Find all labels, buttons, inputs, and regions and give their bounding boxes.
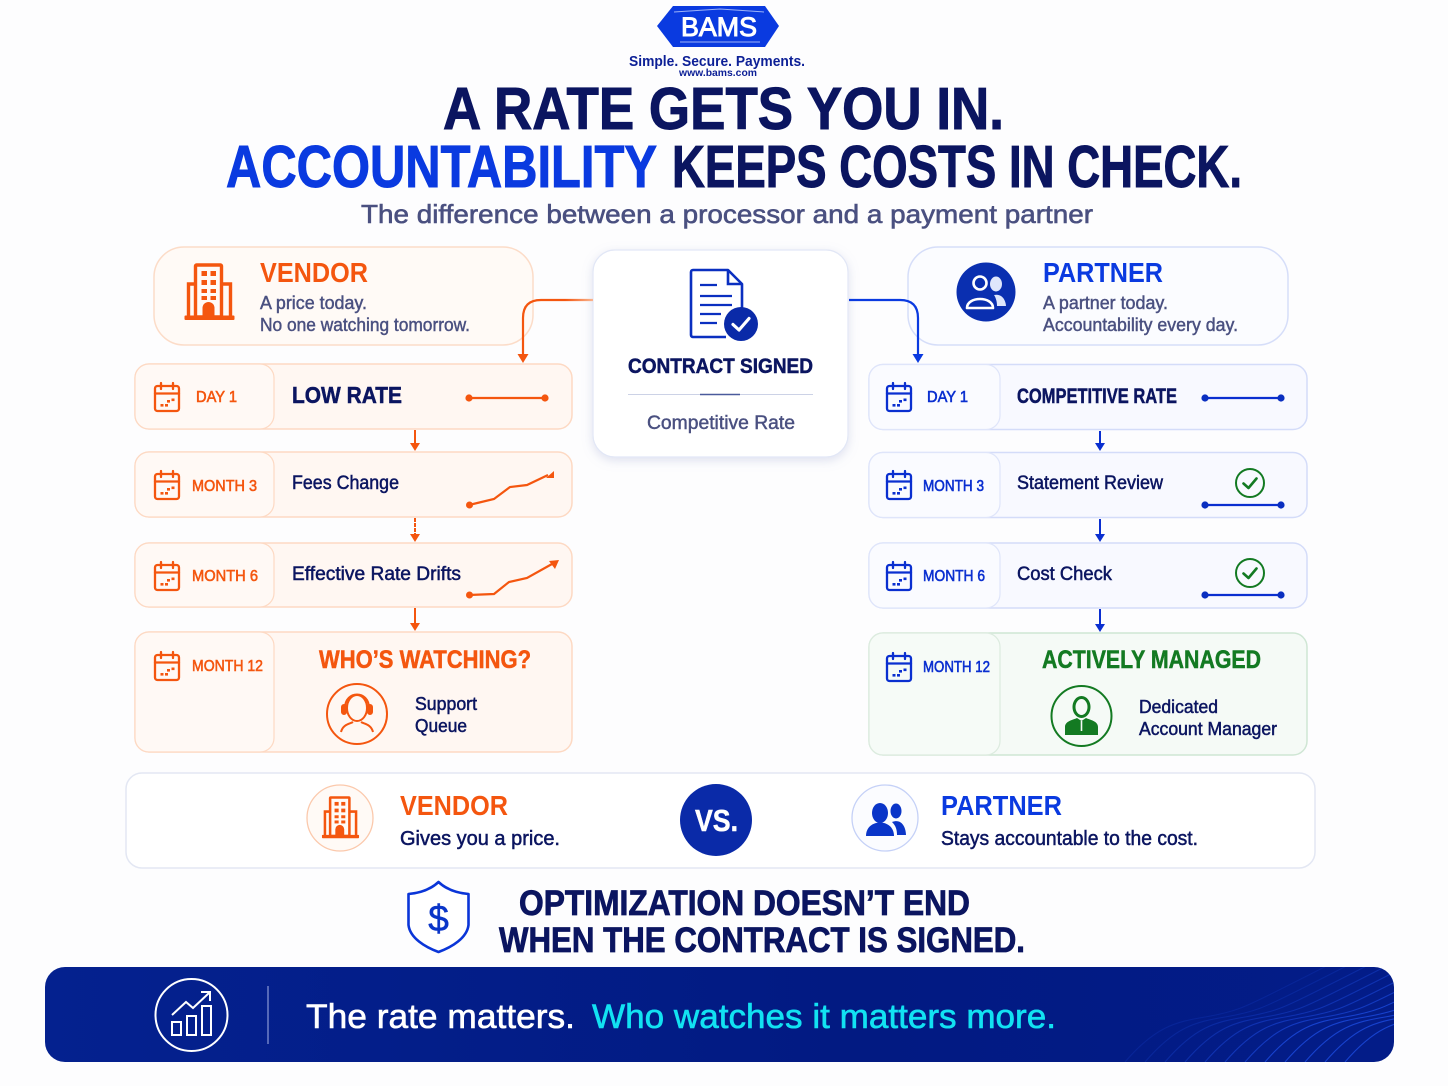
- title: [226, 76, 1242, 200]
- vendor row: month 6: [135, 543, 572, 607]
- subtitle: The difference between a processor and a payment partner: [361, 199, 1093, 229]
- panel: contract signed: [593, 250, 848, 457]
- arrow: [410, 518, 420, 542]
- partner row: month 12: Dedicated: [1139, 697, 1218, 717]
- arrow: [410, 608, 420, 631]
- partner row: month 12: Account Manager: [1139, 719, 1277, 739]
- vendor row: day 1: DAY 1: [196, 389, 237, 406]
- vendor row: month 3: Fees Change: [292, 473, 399, 494]
- vendor row: month 3: MONTH 3: [192, 478, 257, 495]
- vendor header: A price today.: [260, 293, 367, 313]
- partner row: month 3: [869, 452, 1307, 518]
- panel: vendor vs partner: VENDOR: [400, 790, 508, 821]
- icon: shield with dollar: [408, 882, 468, 952]
- vendor row: month 12: Support: [415, 694, 477, 714]
- partner row: day 1: [869, 364, 1307, 430]
- panel: vendor column: [135, 247, 572, 752]
- partner row: month 12: [869, 633, 1307, 755]
- arrow: [1095, 519, 1105, 542]
- partner row: month 12: MONTH 12: [923, 659, 990, 676]
- icon: vendor building: [307, 785, 373, 851]
- icon: account manager: [1052, 686, 1112, 746]
- partner header: A partner today.: [1043, 293, 1168, 313]
- vendor row: month 6: Effective Rate Drifts: [292, 564, 461, 585]
- logo: BAMS: www.bams.com: [678, 67, 757, 79]
- vendor row: month 12: WHO’S WATCHING?: [319, 646, 531, 674]
- partner row: day 1: COMPETITIVE RATE: [1017, 385, 1177, 408]
- banner: [45, 967, 1394, 1062]
- logo: BAMS: [629, 6, 805, 79]
- panel: vendor vs partner: [126, 773, 1315, 868]
- vendor row: day 1: [135, 364, 572, 429]
- banner: Who watches it matters more.: [592, 998, 1056, 1036]
- panel: vendor vs partner: Gives you a price.: [400, 828, 560, 850]
- icon: partner people: [956, 262, 1016, 322]
- vendor row: month 12: Queue: [415, 716, 467, 736]
- title: A RATE GETS YOU IN.: [443, 76, 1004, 142]
- closing statement: OPTIMIZATION DOESN’T END: [519, 884, 970, 923]
- logo: BAMS: Simple. Secure. Payments.: [629, 54, 805, 70]
- vendor row: month 12: [135, 632, 572, 752]
- vendor row: month 12: MONTH 12: [192, 658, 263, 675]
- logo: BAMS: BAMS: [681, 12, 757, 42]
- partner header: PARTNER: [1043, 257, 1163, 288]
- banner: The rate matters.: [306, 998, 575, 1036]
- arrow: contract to partner: [849, 300, 924, 363]
- panel: partner column: [869, 247, 1307, 755]
- vendor row: month 6: MONTH 6: [192, 568, 258, 585]
- badge: VS: VS.: [695, 803, 738, 838]
- panel: contract signed: CONTRACT SIGNED: [628, 355, 813, 378]
- partner row: month 6: MONTH 6: [923, 568, 985, 585]
- partner row: month 6: [869, 543, 1307, 608]
- partner row: month 6: Cost Check: [1017, 564, 1112, 585]
- icon: support agent: [327, 684, 387, 744]
- closing statement: WHEN THE CONTRACT IS SIGNED.: [499, 921, 1025, 960]
- vendor row: month 3: [135, 452, 572, 517]
- vendor header: [154, 247, 533, 345]
- icon: shield with dollar: $: [428, 898, 449, 939]
- partner row: day 1: DAY 1: [927, 389, 968, 406]
- vendor row: day 1: LOW RATE: [292, 382, 402, 408]
- icon: signed document: [691, 270, 758, 341]
- panel: vendor vs partner: Stays accountable to the cost.: [941, 828, 1198, 850]
- partner header: [908, 247, 1288, 345]
- icon: growth chart: [156, 979, 228, 1051]
- badge: VS: [680, 784, 752, 856]
- partner row: month 3: MONTH 3: [923, 478, 984, 495]
- partner header: Accountability every day.: [1043, 315, 1238, 335]
- closing statement: [499, 884, 1025, 960]
- title: ACCOUNTABILITY: [226, 134, 657, 200]
- arrow: [1095, 609, 1105, 632]
- vendor header: No one watching tomorrow.: [260, 315, 470, 335]
- icon: partner people: [852, 785, 918, 851]
- vendor header: VENDOR: [260, 257, 368, 288]
- arrow: [1095, 431, 1105, 451]
- partner row: month 3: Statement Review: [1017, 473, 1163, 494]
- partner row: month 12: ACTIVELY MANAGED: [1042, 646, 1261, 674]
- panel: contract signed: Competitive Rate: [647, 413, 795, 434]
- arrow: contract to vendor: [518, 300, 593, 363]
- arrow: [410, 430, 420, 451]
- title: KEEPS COSTS IN CHECK.: [672, 134, 1242, 200]
- panel: vendor vs partner: PARTNER: [941, 790, 1062, 821]
